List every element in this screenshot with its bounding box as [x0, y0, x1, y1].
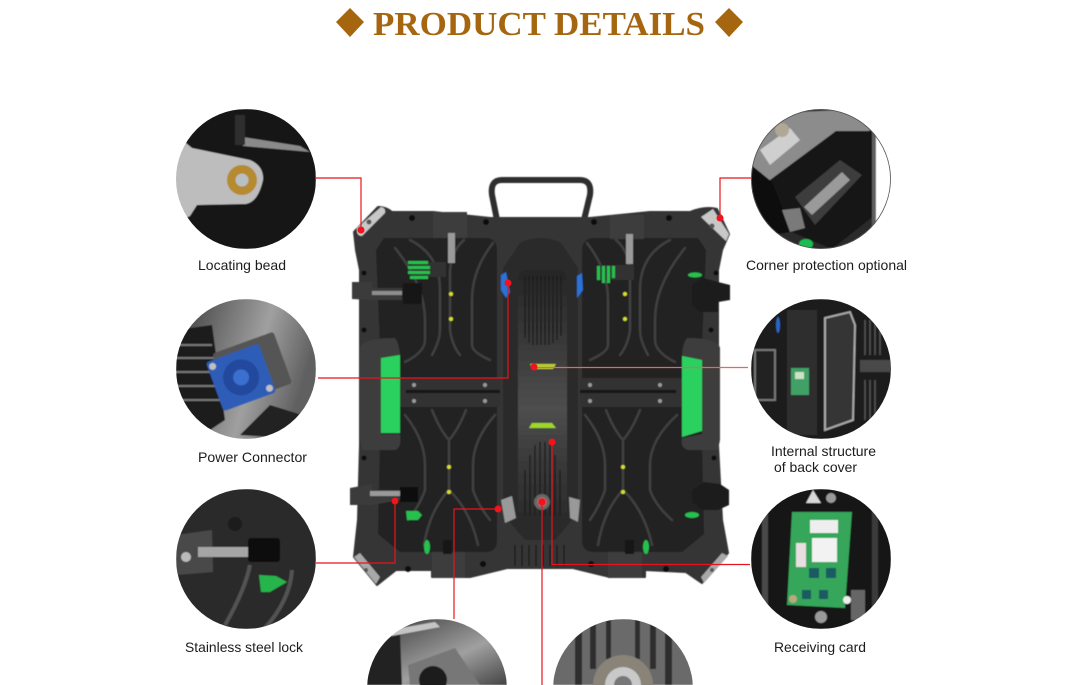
green side handles [381, 355, 702, 437]
center console [501, 238, 583, 566]
circle: power connector [176, 299, 318, 440]
circle: connector close-up [367, 619, 507, 685]
panel ribs [395, 240, 685, 545]
side handle housings [360, 338, 720, 450]
circle outline [752, 110, 890, 248]
cabinet body [354, 207, 729, 585]
circle: stainless steel lock [176, 489, 316, 629]
mounting points [447, 292, 627, 494]
heading text: PRODUCT DETAILS [373, 6, 705, 43]
rear knob [534, 494, 550, 510]
circle: receiving card [751, 489, 891, 629]
LED panel back view [350, 180, 730, 585]
bottom clamps [432, 540, 642, 578]
label: of back cover: of back cover [774, 459, 857, 475]
label: locating bead: Locating bead [198, 257, 286, 273]
leader lines [316, 178, 751, 685]
circle: internal structure [751, 299, 892, 439]
green latches [406, 261, 702, 554]
icon: left diamond [336, 8, 364, 37]
title [336, 6, 743, 43]
icon: right diamond [715, 8, 743, 37]
label: corner protection: Corner protection optional [746, 257, 907, 273]
power connector blue tabs [501, 272, 510, 298]
corner protectors [354, 207, 729, 584]
rim holes [362, 215, 718, 572]
side locks [350, 278, 730, 510]
left inner bay [376, 238, 497, 552]
circle: rear knob close-up [553, 619, 693, 685]
marker dots [358, 214, 724, 512]
label: internal structure: Internal structure [771, 443, 876, 459]
carrying handle [492, 180, 590, 220]
top clamps [406, 212, 702, 554]
status stripes [530, 364, 556, 369]
circle: corner protection [751, 109, 896, 249]
horizontal cross bars [400, 378, 682, 407]
label: receiving card: Receiving card [774, 639, 866, 655]
bottom silver brackets [501, 496, 516, 523]
circle: locating bead [170, 109, 316, 249]
label: stainless steel lock: Stainless steel lock [185, 639, 304, 655]
label: power connector: Power Connector [198, 449, 307, 465]
right inner bay [582, 238, 706, 552]
